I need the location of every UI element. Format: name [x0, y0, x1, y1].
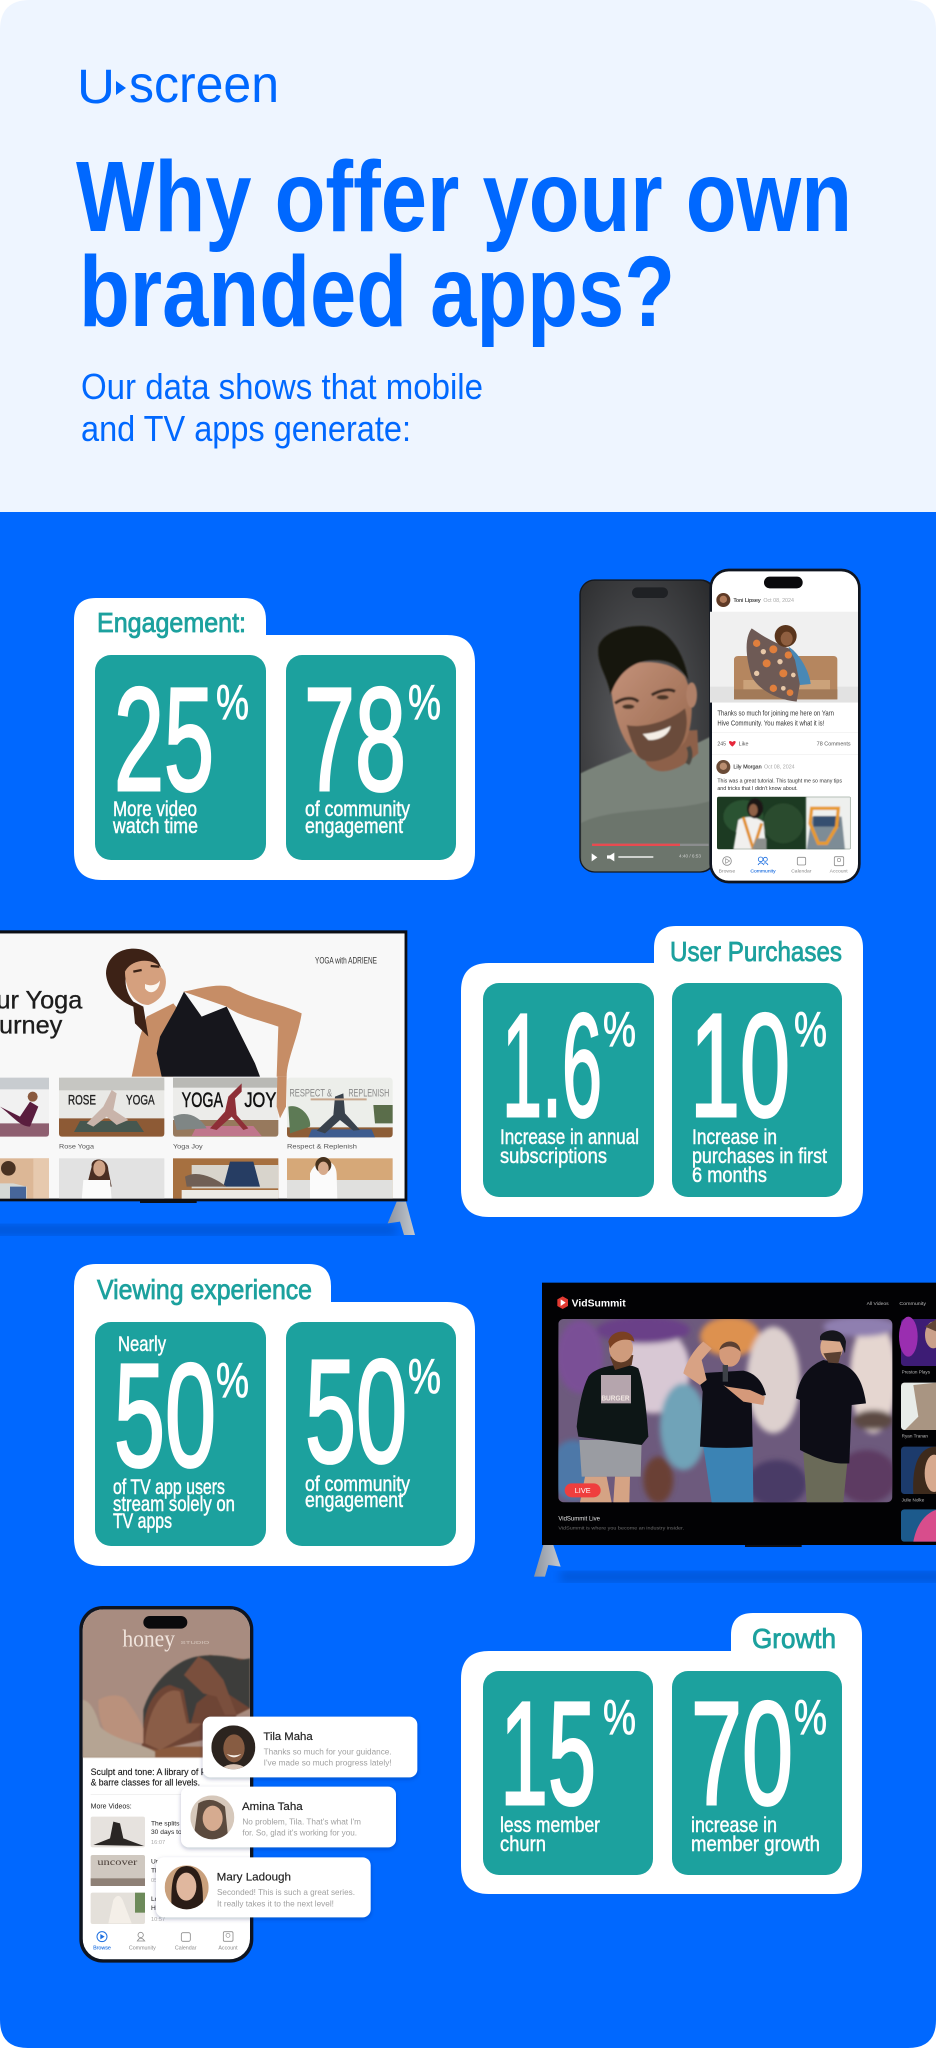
thumbnail labels: Yoga Joy — [173, 1143, 203, 1150]
instructor hand — [277, 1077, 287, 1118]
TV screen — [0, 933, 405, 1199]
nav bar: Browse, Community, Calendar, Account: Browse — [93, 1945, 111, 1951]
phone body — [79, 1606, 253, 1963]
stat: 25% more video watch time: 25 — [114, 658, 214, 822]
speaker centre — [703, 1447, 753, 1502]
comment card: Amina Taha: No problem, Tila. That's what I'm — [242, 1816, 361, 1826]
subtitle: Our data shows that mobile — [81, 366, 483, 407]
nav links: Community — [899, 1301, 927, 1307]
nav bar: Browse, Community, Calendar, Account: Account — [830, 869, 848, 875]
video thumbnails row 1 — [0, 1078, 393, 1137]
hero text — [0, 986, 83, 1039]
video thumbnails row 1: REPLENISH — [348, 1088, 389, 1100]
video list — [90, 1816, 181, 1924]
comment card: Mary Ladough — [156, 1857, 371, 1917]
blue background panel — [0, 500, 936, 2048]
nav bar: Browse, Community, Calendar, Account: Calendar — [175, 1945, 197, 1951]
video thumbnails row 1: YOGA — [182, 1088, 224, 1112]
TV screen — [542, 1283, 936, 1545]
comment card: Tila Maha: I've made so much progress lately! — [264, 1758, 392, 1768]
phone: video player — [579, 579, 716, 873]
panel: growth — [461, 1613, 862, 1894]
phone: community feed: This was a great tutorial. This taught me so many tips — [717, 779, 842, 785]
stat: 50% of community engagement: of community — [305, 1473, 410, 1496]
section label: More Videos: — [91, 1803, 132, 1810]
stat: 50% of community engagement: engagement — [305, 1489, 403, 1512]
stat: 70% increase in member growth — [672, 1671, 842, 1875]
stat: nearly 50% of TV app users: of TV app users — [113, 1476, 225, 1499]
video thumbnails row 1: ROSE — [68, 1092, 96, 1107]
stat: 25% more video watch time: More video — [113, 798, 197, 821]
heading: Growth: Growth — [752, 1623, 836, 1654]
video list: 16:07 — [151, 1840, 165, 1846]
comment card: Mary Ladough: Seconded! This is such a great series. — [217, 1887, 355, 1897]
stat: nearly 50% of TV app users — [95, 1322, 266, 1546]
stat: 10% increase in purchases: purchases in first — [692, 1145, 827, 1168]
stat: 70% increase in member growth: % — [794, 1691, 827, 1745]
video list: Long — [151, 1896, 166, 1903]
stat: 10% increase in purchases: Increase in — [692, 1126, 777, 1149]
phone: community feed: Oct 08, 2024 — [763, 598, 794, 604]
video list: Hold — [151, 1905, 165, 1912]
stat: 15% less member churn: churn — [500, 1833, 546, 1856]
comment card: Mary Ladough: Mary Ladough — [217, 1872, 291, 1884]
stat: 1.6% increase in annual subscriptions: subscriptions — [500, 1145, 607, 1168]
phone: honey studio app with comments — [79, 1606, 417, 1963]
post photo: woman on sofa with crochet blanket — [710, 612, 858, 703]
phone: community feed: Lily Morgan — [733, 765, 762, 771]
heading: User Purchases: User Purchases — [670, 936, 842, 967]
stat: 15% less member churn: % — [603, 1691, 636, 1745]
stat: 1.6% increase in annual subscriptions — [483, 983, 654, 1197]
stat: 10% increase in purchases: 10 — [690, 984, 790, 1148]
stat: 1.6% increase in annual subscriptions: Increase in annual — [500, 1126, 639, 1149]
app headline — [90, 1768, 204, 1786]
stat: 15% less member churn — [483, 1671, 653, 1875]
stat: 1.6% increase in annual subscriptions: 1.6 — [502, 984, 602, 1148]
comment card: Mary Ladough: It really takes it to the next level! — [217, 1898, 334, 1908]
logo: Uscreen: U — [77, 61, 115, 114]
logo text: YOGA with ADRIENE — [315, 955, 377, 965]
stat: 10% increase in purchases: % — [794, 1003, 827, 1057]
logo: honey studio: honey — [122, 1627, 175, 1653]
video list: 05:10 — [151, 1878, 165, 1884]
heading: Viewing experience: Viewing experience — [97, 1274, 312, 1305]
logo: VidSummit — [557, 1296, 626, 1310]
thumbnail labels — [60, 1144, 356, 1150]
TV stand — [534, 1545, 561, 1577]
video list: Uncover — [151, 1858, 177, 1865]
stat: 78% of community engagement: % — [408, 676, 441, 730]
nav bar: Browse, Community, Calendar, Account: Account — [218, 1945, 238, 1951]
phone screen — [83, 1609, 250, 1959]
video list: 10:57 — [151, 1917, 165, 1923]
nav bar: Browse, Community, Calendar, Account — [93, 1932, 238, 1951]
nav bar: Browse, Community, Calendar, Account: Community — [750, 869, 776, 875]
nav bar: Browse, Community, Calendar, Account: Browse — [719, 869, 736, 875]
TV stand — [388, 1202, 415, 1235]
panel: user purchases — [461, 926, 863, 1217]
side thumbnail labels: Julie Nolke — [902, 1498, 925, 1503]
comment card: Amina Taha — [181, 1787, 396, 1847]
stat: 70% increase in member growth: 70 — [691, 1672, 793, 1836]
stat: nearly 50% of TV app users: stream solely on — [113, 1493, 235, 1516]
stat: 78% of community engagement — [286, 655, 456, 860]
video title: VidSummit Live — [558, 1516, 600, 1523]
yoga instructor photo — [106, 949, 302, 1077]
comment card: Amina Taha: for. So, glad it's working for you. — [242, 1828, 357, 1838]
thumbnail labels: Rose Yoga — [59, 1143, 94, 1150]
stat: 70% increase in member growth: member growth — [691, 1833, 820, 1856]
floor shadow — [0, 1225, 397, 1235]
nav bar: Browse, Community, Calendar, Account: Community — [129, 1945, 156, 1951]
video list: 30 days to — [151, 1829, 182, 1836]
LIVE badge — [565, 1483, 601, 1497]
logo: VidSummit: VidSummit — [572, 1299, 626, 1310]
video list: uncover — [97, 1858, 139, 1868]
nav links — [867, 1301, 927, 1307]
LIVE badge: LIVE — [575, 1486, 591, 1495]
phone: community feed: and tricks that I didn't know about. — [717, 786, 798, 792]
TV: VidSummit app — [534, 1283, 936, 1582]
panel: engagement — [74, 598, 475, 880]
icon: heart — [729, 741, 736, 747]
two phones: video player and community feed — [579, 569, 861, 883]
side thumbnail labels: Preston Plays — [902, 1369, 930, 1374]
TV bezel — [0, 930, 407, 1201]
header panel — [0, 0, 936, 512]
stat: 78% of community engagement: of community — [305, 798, 410, 821]
logo: Uscreen: screen — [129, 56, 279, 114]
phone: community feed: Like — [739, 741, 748, 747]
subtitle — [81, 366, 483, 449]
app headline: Sculpt and tone: A library of Pilates — [91, 1767, 228, 1777]
subtitle: and TV apps generate: — [81, 408, 411, 449]
phone: community feed — [709, 569, 861, 883]
video description: VidSummit is where you become an industry insider. — [558, 1525, 684, 1531]
heading: Engagement: Engagement: — [97, 607, 246, 638]
video thumbnails row 2 — [0, 1157, 393, 1200]
nav bar: Browse, Community, Calendar, Account: Calendar — [791, 869, 812, 875]
video list: The splits challenge — [151, 1820, 210, 1827]
hero photo — [83, 1609, 250, 1757]
phone: community feed: Hive Community. You makes it what it is! — [717, 720, 824, 727]
app headline: & barre classes for all levels. — [91, 1777, 200, 1787]
stat: 78% of community engagement: engagement — [305, 815, 403, 838]
comment card: Tila Maha: Thanks so much for your guidance. — [264, 1746, 392, 1756]
phone: community feed: 245 — [717, 741, 726, 747]
stat: nearly 50% of TV app users: % — [216, 1354, 249, 1408]
stat: 50% of community engagement: 50 — [305, 1330, 407, 1494]
stat: 1.6% increase in annual subscriptions: % — [603, 1003, 636, 1057]
nav links: All Videos — [867, 1301, 889, 1307]
stat: 25% more video watch time: % — [216, 676, 249, 730]
video thumbnails row 1: YOGA — [126, 1092, 155, 1107]
stat: 70% increase in member growth: increase in — [691, 1814, 777, 1837]
post photo: crochet bag — [717, 797, 851, 849]
stat: 10% increase in purchases — [672, 983, 842, 1197]
stat: 50% of community engagement — [286, 1322, 456, 1546]
comment card: Tila Maha — [203, 1717, 417, 1777]
stat: 15% less member churn: 15 — [500, 1672, 596, 1836]
panel: viewing experience — [74, 1264, 475, 1566]
video thumbnails row 1: JOY — [244, 1088, 276, 1112]
main video still with three speakers — [550, 1317, 897, 1507]
stat: 50% of community engagement: % — [408, 1350, 441, 1404]
phone: community feed: Oct 08, 2024 — [764, 765, 795, 771]
TV: Yoga with Adriene app — [0, 930, 415, 1235]
nav bar: Browse, Community, Calendar, Account — [719, 857, 848, 875]
floor shadow — [560, 1572, 936, 1582]
phone: community feed: Toni Lipsey — [733, 598, 761, 604]
phone: community feed: Thanks so much for joining me here on Yarn — [717, 710, 834, 717]
speaker right — [803, 1453, 848, 1502]
speaker left — [580, 1477, 612, 1502]
stat: 25% more video watch time: watch time — [112, 815, 198, 838]
comment card: Amina Taha: Amina Taha — [242, 1801, 304, 1813]
stat: 15% less member churn: less member — [500, 1814, 600, 1837]
stat: nearly 50% of TV app users: 50 — [114, 1334, 216, 1498]
phone: video player: 4:40 / 6:53 — [679, 854, 701, 859]
title — [76, 141, 852, 348]
phone: community feed: 78 Comments — [817, 741, 851, 747]
side thumbnails — [899, 1317, 936, 1542]
main video still with three speakers: BURGER — [601, 1394, 630, 1403]
comment card: Tila Maha: Tila Maha — [263, 1731, 314, 1743]
stat: 25% more video watch time — [95, 655, 266, 860]
side thumbnail labels: Ryan Tranan — [902, 1433, 929, 1438]
video thumbnails row 1: RESPECT & — [289, 1088, 332, 1100]
stat: nearly 50% of TV app users: Nearly — [118, 1333, 166, 1356]
stat: 10% increase in purchases: 6 months — [692, 1164, 767, 1187]
stat: 78% of community engagement: 78 — [304, 658, 406, 822]
title: branded apps? — [79, 236, 675, 348]
thumbnail labels: Respect & Replenish — [287, 1143, 357, 1150]
video list: The — [151, 1868, 163, 1875]
hero photo: STUDIO — [181, 1640, 209, 1646]
stat: nearly 50% of TV app users: TV apps — [113, 1510, 172, 1533]
side thumbnail labels — [902, 1369, 930, 1503]
